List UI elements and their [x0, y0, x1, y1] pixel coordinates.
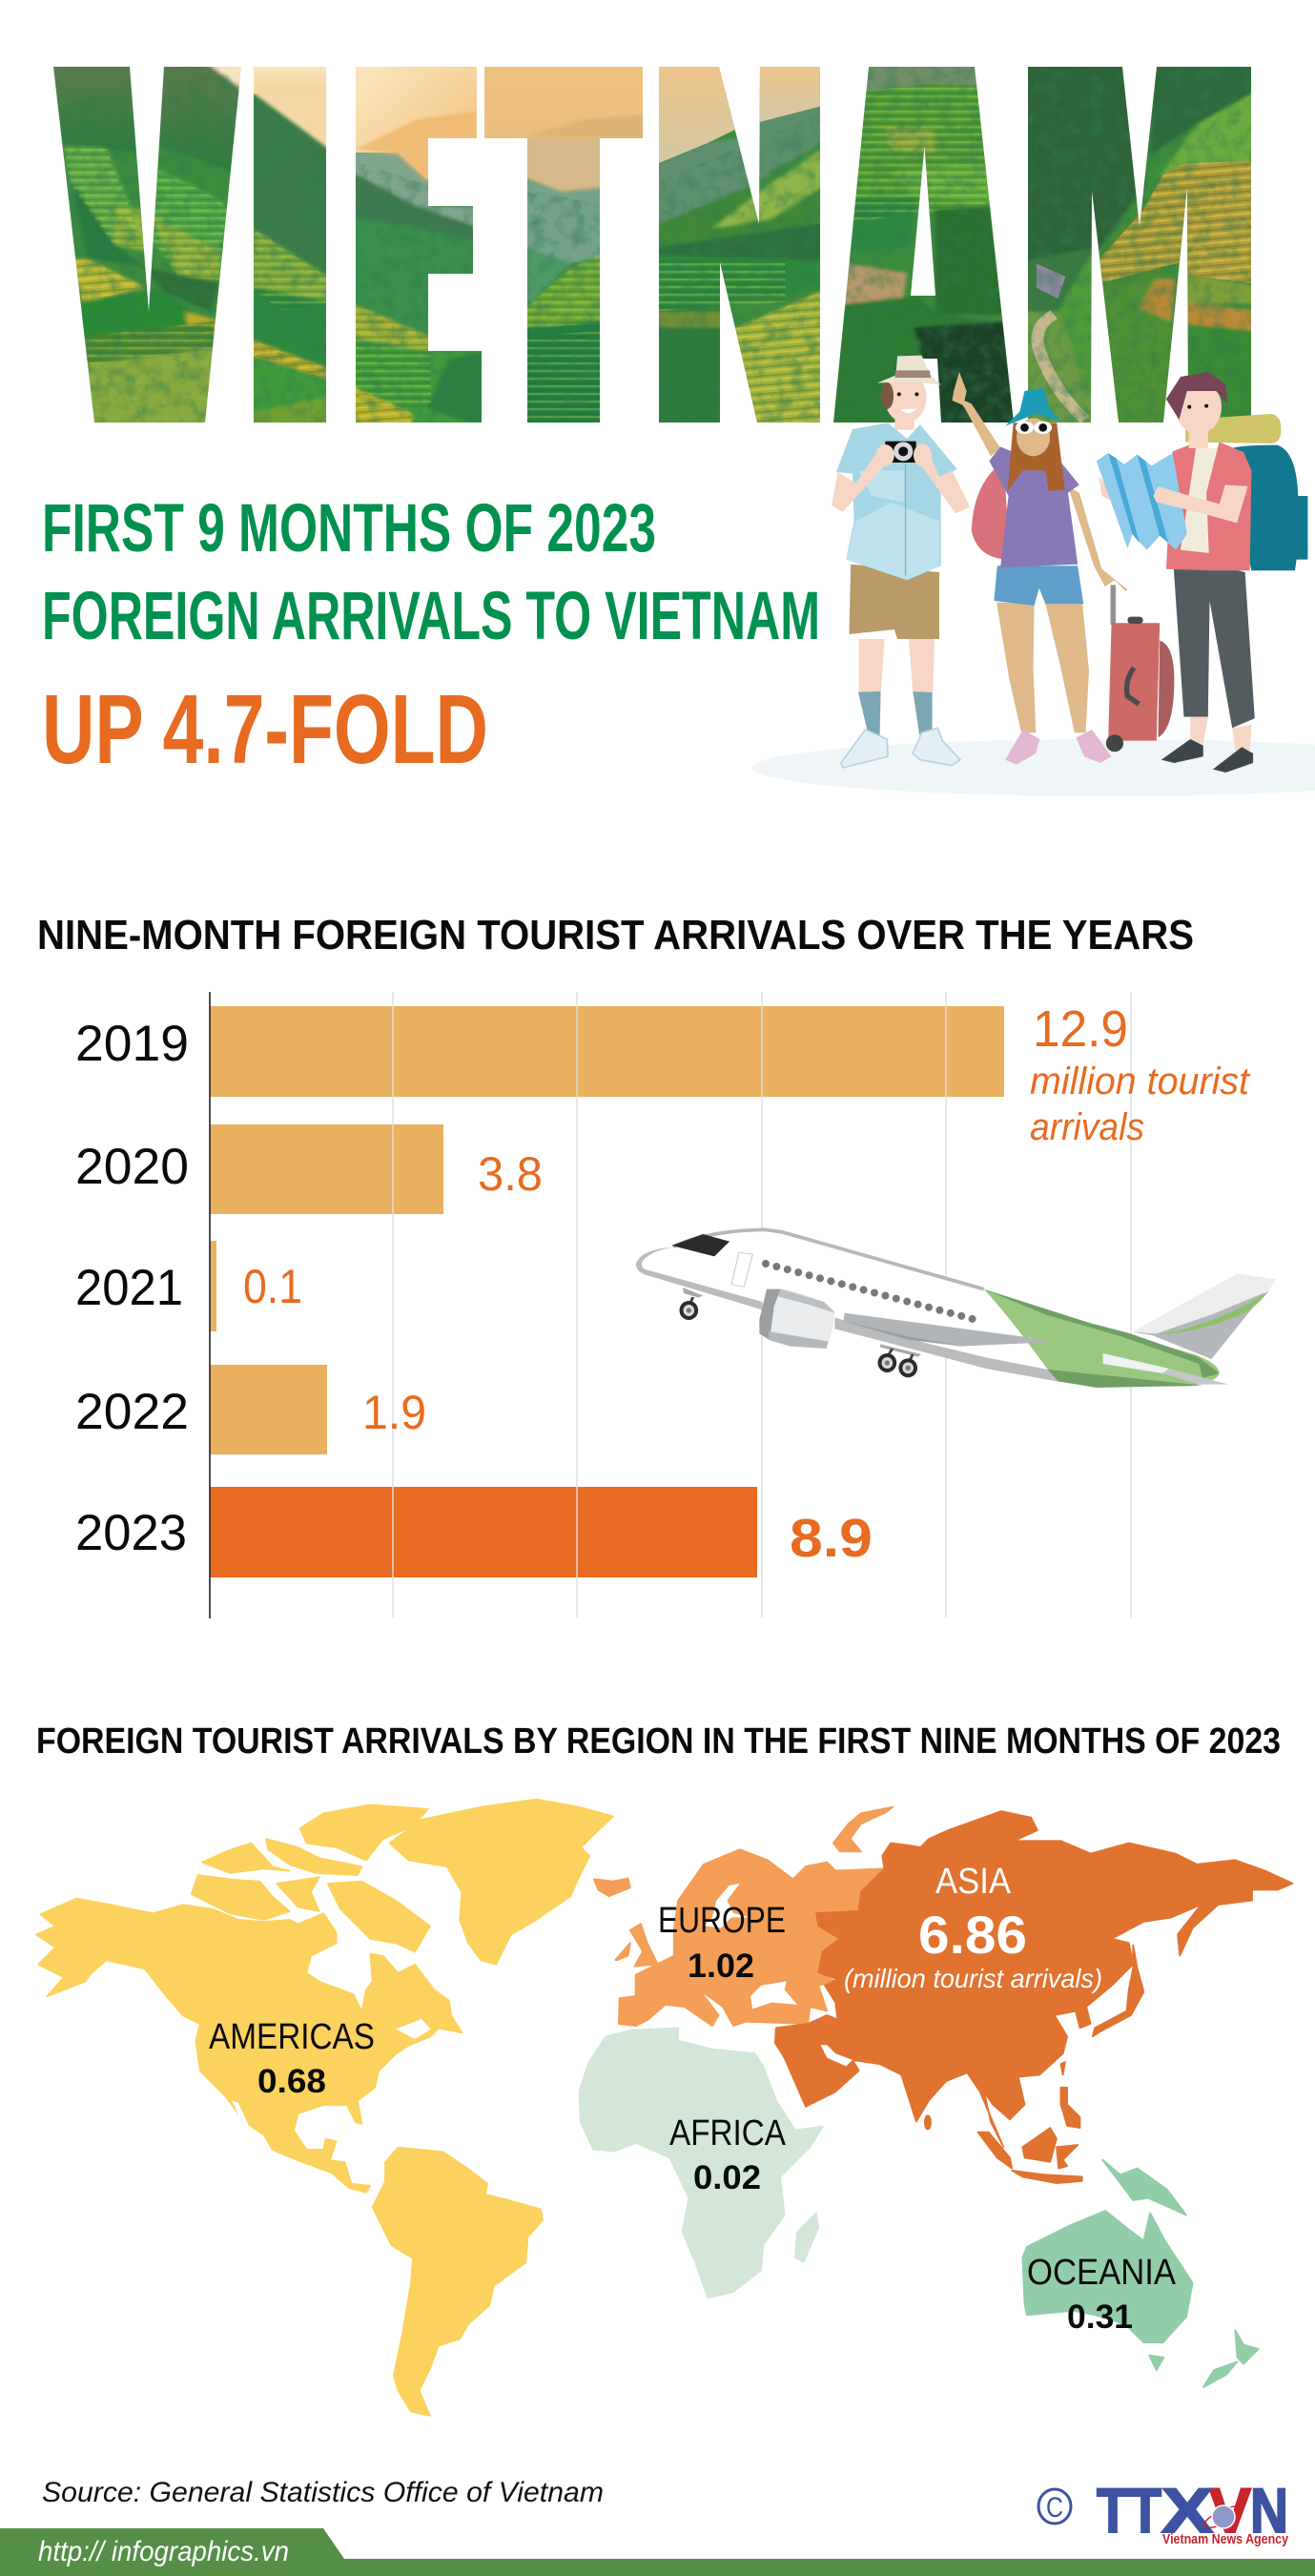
- label: Oceania 0.31: 0.31: [1067, 2298, 1133, 2336]
- heading: up 4.7-fold: UP 4.7-FOLD: [42, 674, 488, 784]
- label: Asia 6.86 million tourist arrivals: 6.86: [918, 1905, 1027, 1965]
- heading: first 9 months of 2023: FIRST 9 MONTHS OF 2023: [42, 491, 656, 567]
- value labels: 8.9: [790, 1508, 873, 1569]
- value labels: 0.1: [243, 1260, 302, 1313]
- icon: airplane: [636, 1229, 1275, 1388]
- value labels: arrivals: [1030, 1106, 1144, 1148]
- footer bar with url tab: http:// infographics.vn: [38, 2536, 289, 2567]
- logo: TTXVN Vietnam News Agency: V: [1209, 2475, 1251, 2545]
- label: Americas 0.68: [209, 2017, 375, 2100]
- label: Africa 0.02: 0.02: [693, 2159, 761, 2196]
- year labels: [75, 1016, 189, 1561]
- label: Europe 1.02: 1.02: [688, 1947, 754, 1985]
- label: Africa 0.02: [669, 2113, 787, 2196]
- year labels: 2020: [75, 1139, 189, 1195]
- bar chart: arrivals by year: [75, 992, 1251, 1618]
- source note: Source: General Statistics Office of Vietnam: [42, 2477, 604, 2508]
- bar: 2021: [210, 1241, 216, 1331]
- label: Africa 0.02: AFRICA: [669, 2113, 787, 2154]
- value labels: [243, 1000, 1251, 1569]
- bar: 2019: [210, 1006, 1004, 1097]
- world map: [36, 1800, 1292, 2416]
- illustration: three tourists: [751, 356, 1315, 796]
- value labels: million tourist: [1030, 1061, 1251, 1103]
- map region: Asia: [775, 1811, 1292, 2183]
- label: Americas 0.68: AMERICAS: [209, 2017, 375, 2057]
- year labels: 2021: [75, 1260, 183, 1316]
- label: Asia 6.86 million tourist arrivals: ASIA: [935, 1862, 1012, 1902]
- map region: Americas: [36, 1800, 613, 2416]
- year labels: 2022: [75, 1384, 189, 1440]
- section heading: nine-month arrivals: NINE-MONTH FOREIGN TOURIST ARRIVALS OVER THE YEARS: [37, 912, 1194, 958]
- year labels: 2023: [75, 1505, 187, 1561]
- label: Asia 6.86 million tourist arrivals: (million tourist arrivals): [844, 1964, 1102, 1993]
- value labels: 12.9: [1033, 1000, 1128, 1058]
- title: VIETNAM photo-filled letters: [36, 57, 1272, 436]
- logo: TTXVN Vietnam News Agency: X: [1161, 2475, 1213, 2545]
- year labels: 2019: [75, 1016, 189, 1072]
- label: Americas 0.68: 0.68: [257, 2063, 326, 2100]
- tourist: man with map and backpack: [1097, 372, 1307, 773]
- logo: TTXVN Vietnam News Agency: Vietnam News Agency: [1162, 2531, 1289, 2547]
- icon: copyright: C: [1046, 2492, 1063, 2524]
- value labels: 3.8: [478, 1147, 543, 1201]
- map region: Europe: [594, 1807, 893, 2026]
- footer bar with url tab: [0, 2528, 1315, 2576]
- icon: copyright: [1038, 2489, 1071, 2524]
- label: Europe 1.02: EUROPE: [658, 1901, 786, 1941]
- heading: foreign arrivals to Vietnam: FOREIGN ARRIVALS TO VIETNAM: [42, 579, 820, 654]
- label: Oceania 0.31: OCEANIA: [1027, 2253, 1177, 2293]
- bar: 2023: [210, 1487, 757, 1577]
- logo: TTXVN Vietnam News Agency: TT: [1097, 2475, 1161, 2545]
- label: Asia 6.86 million tourist arrivals: [844, 1862, 1102, 1993]
- bar: 2022: [210, 1365, 327, 1454]
- map region: Oceania: [1022, 2160, 1259, 2387]
- map region: Africa: [579, 2028, 823, 2298]
- label: Europe 1.02: [658, 1901, 786, 1985]
- bar: 2020: [210, 1124, 443, 1214]
- logo: TTXVN Vietnam News Agency: [1038, 2475, 1289, 2547]
- logo: TTXVN Vietnam News Agency: N: [1250, 2475, 1288, 2545]
- label: Oceania 0.31: [1027, 2253, 1177, 2336]
- value labels: 1.9: [362, 1386, 426, 1439]
- tourist: man with camera: [832, 356, 970, 768]
- lines: terraces A: [63, 146, 145, 248]
- tourist: woman with suitcase: [952, 372, 1174, 765]
